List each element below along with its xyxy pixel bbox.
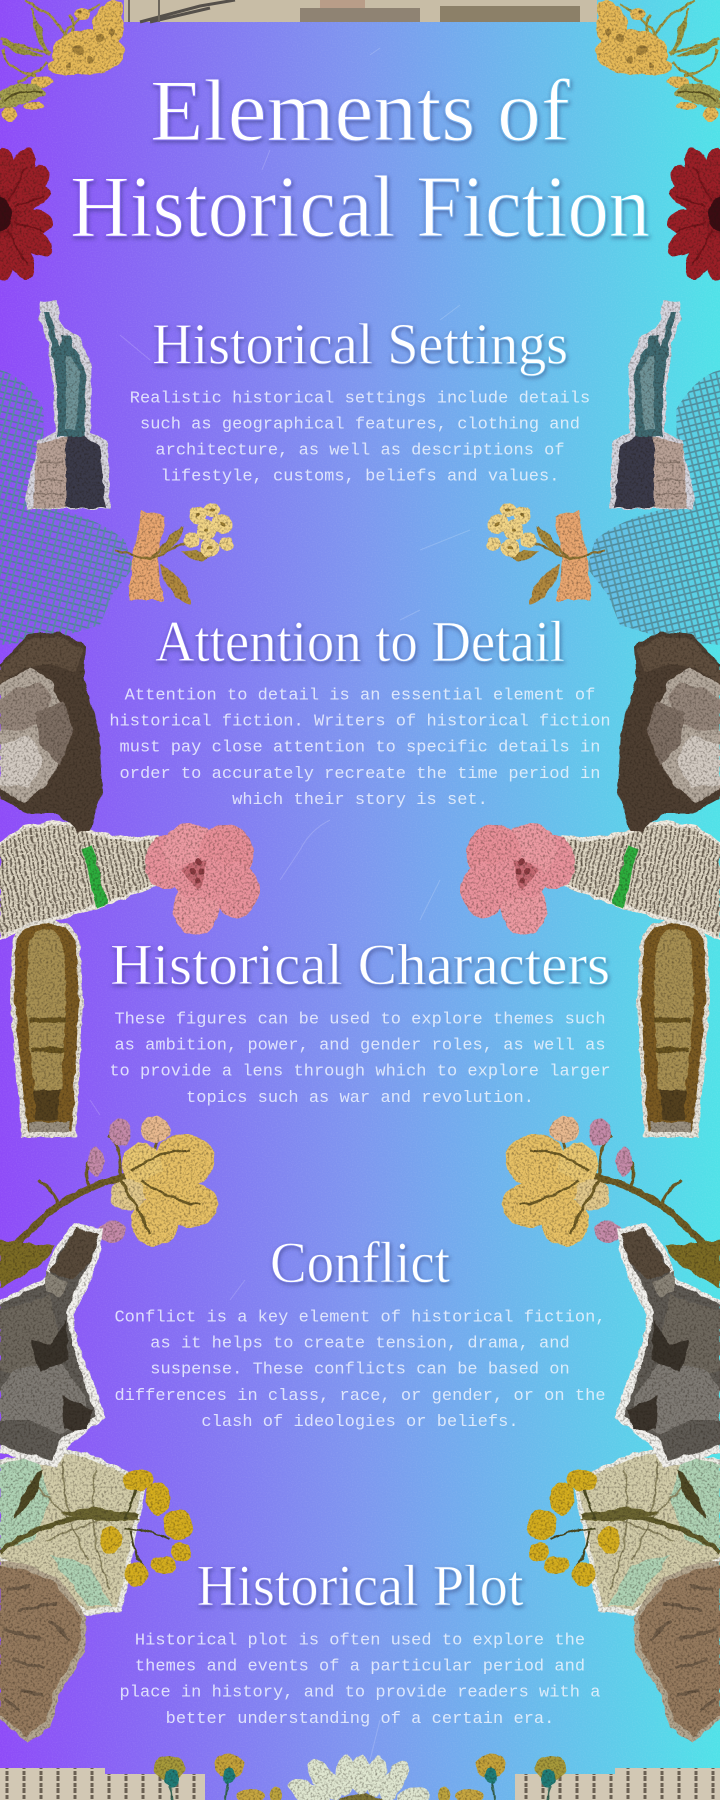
- burlap mesh right: [587, 370, 720, 645]
- sarcophagus right: [637, 920, 710, 1138]
- body text: lifestyle, customs, beliefs and values.: [160, 468, 560, 487]
- statue of liberty right: [610, 300, 695, 509]
- heading: Conflict: [270, 1230, 450, 1295]
- pink flower left: [145, 823, 259, 935]
- yellow flowers top left: [0, 0, 124, 122]
- twig with tape left: [115, 502, 233, 605]
- body text: as it helps to create tension, drama, and: [150, 1335, 570, 1354]
- newspaper strip bottom right: [515, 1768, 720, 1800]
- section: Historical Plot: [120, 1553, 600, 1729]
- body text: suspense. These conflicts can be based on: [150, 1361, 570, 1380]
- heading: Historical Settings: [152, 312, 568, 376]
- warrior statue right: [614, 1223, 720, 1468]
- newspaper strip bottom left: [0, 1768, 205, 1800]
- title: Elements of: [150, 63, 571, 160]
- body text: such as geographical features, clothing and: [140, 416, 580, 435]
- body text: place in history, and to provide readers with a: [120, 1684, 600, 1703]
- warrior statue left: [0, 1223, 106, 1468]
- title: Historical Fiction: [70, 159, 650, 256]
- body text: order to accurately recreate the time period in: [120, 765, 600, 784]
- body text: [109, 686, 611, 810]
- section: Conflict: [114, 1230, 606, 1432]
- title: [70, 63, 650, 256]
- body text: [130, 390, 590, 487]
- section: Historical Settings: [130, 312, 590, 487]
- body text: historical fiction. Writers of historical fiction: [109, 712, 611, 732]
- newspaper scrap left: [0, 820, 165, 939]
- top photo strip: [124, 0, 597, 22]
- body text: themes and events of a particular period and: [135, 1658, 585, 1677]
- body text: Conflict is a key element of historical fiction,: [114, 1308, 606, 1327]
- red flower left: [0, 144, 58, 284]
- small flowers bottom left: [154, 1754, 283, 1800]
- body text: topics such as war and revolution.: [186, 1089, 534, 1108]
- body text: [120, 1632, 600, 1729]
- body text: differences in class, race, or gender, or on the: [114, 1387, 606, 1406]
- yellow flowers top right: [596, 0, 720, 122]
- flowering branch left: [0, 1117, 218, 1288]
- david statue left: [0, 632, 102, 833]
- stone tablet right: [633, 1560, 720, 1742]
- red flower right: [662, 144, 720, 284]
- body text: which their story is set.: [232, 791, 488, 810]
- flowering branch right: [502, 1117, 720, 1288]
- body text: Attention to detail is an essential element of: [125, 686, 595, 706]
- newspaper scrap right: [555, 820, 720, 939]
- body text: as ambition, power, and gender roles, as well as: [114, 1037, 606, 1056]
- section: Attention to Detail: [109, 609, 611, 810]
- sarcophagus left: [10, 920, 83, 1138]
- body text: must pay close attention to specific details in: [120, 738, 600, 758]
- body text: to provide a lens through which to explore larger: [109, 1063, 611, 1082]
- burlap mesh left: [0, 370, 133, 645]
- map scrap left: [0, 1449, 147, 1615]
- body text: [114, 1308, 606, 1432]
- statue of liberty left: [25, 300, 110, 509]
- section: Historical Characters: [109, 932, 611, 1108]
- yellow sprig right: [527, 1469, 720, 1586]
- david statue right: [618, 632, 720, 833]
- heading: Historical Characters: [110, 932, 610, 997]
- body text: architecture, as well as descriptions of: [155, 442, 565, 461]
- body text: [109, 1011, 611, 1108]
- pink flower right: [461, 823, 575, 935]
- body text: Historical plot is often used to explore the: [135, 1632, 585, 1651]
- small flowers bottom right: [437, 1754, 566, 1800]
- body text: better understanding of a certain era.: [166, 1710, 554, 1729]
- body text: These figures can be used to explore themes such: [114, 1011, 606, 1030]
- yellow sprig left: [0, 1469, 193, 1586]
- twig with tape right: [487, 502, 605, 605]
- heading: Attention to Detail: [155, 609, 565, 674]
- body text: Realistic historical settings include details: [130, 390, 590, 409]
- white daisy bottom: [284, 1754, 434, 1800]
- body text: clash of ideologies or beliefs.: [201, 1413, 519, 1432]
- heading: Historical Plot: [196, 1553, 524, 1618]
- stone tablet left: [0, 1560, 87, 1742]
- map scrap right: [573, 1449, 720, 1615]
